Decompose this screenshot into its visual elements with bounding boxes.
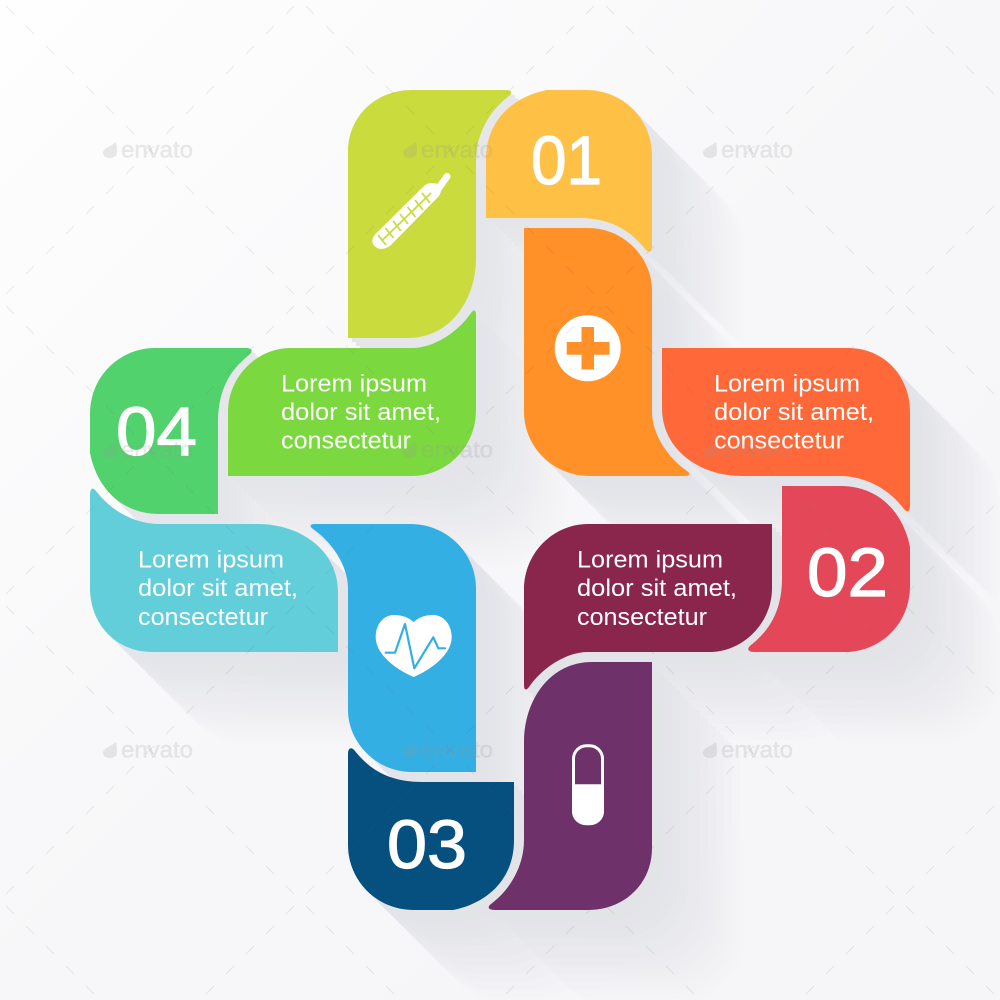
- panel: step 02 (red): [748, 486, 910, 652]
- icon: medical cross: [555, 315, 621, 381]
- icon: pill: [572, 746, 604, 825]
- text block: dolor sit amet,: [281, 399, 441, 426]
- text block: dolor sit amet,: [714, 399, 874, 426]
- text block: consectetur: [281, 428, 411, 455]
- panel: heart (blue): [311, 524, 476, 772]
- text block: [714, 371, 874, 455]
- icon: heart with pulse: [376, 615, 452, 677]
- panel: thermometer (lime): [348, 90, 511, 338]
- panel: text top right (red-orange): [662, 348, 910, 511]
- panel: step 03 (navy): [348, 748, 514, 910]
- text block: consectetur: [714, 428, 844, 455]
- icon: thermometer: [372, 176, 447, 249]
- panel: text lower right (maroon): [524, 524, 772, 689]
- text block: [281, 371, 441, 455]
- panel: medical cross (orange): [524, 228, 689, 476]
- panel: step 01 (yellow): [486, 90, 652, 252]
- text block: dolor sit amet,: [577, 575, 737, 602]
- panel: pill (purple): [489, 662, 652, 910]
- text block: Lorem ipsum: [138, 547, 284, 574]
- text block: consectetur: [577, 604, 707, 631]
- text block: [138, 547, 298, 631]
- panel: text lower left (cyan): [90, 489, 338, 652]
- text block: [577, 547, 737, 631]
- text block: Lorem ipsum: [281, 371, 427, 398]
- number 03: 03: [387, 806, 467, 883]
- panel: text upper left (light green): [228, 311, 476, 476]
- panel: step 04 (green): [90, 348, 252, 514]
- text block: consectetur: [138, 604, 268, 631]
- text block: dolor sit amet,: [138, 575, 298, 602]
- number 04: 04: [116, 393, 197, 470]
- text block: Lorem ipsum: [577, 547, 723, 574]
- number 02: 02: [807, 534, 888, 611]
- number 01: 01: [531, 122, 602, 199]
- text block: Lorem ipsum: [714, 371, 860, 398]
- watermarks: [103, 136, 793, 762]
